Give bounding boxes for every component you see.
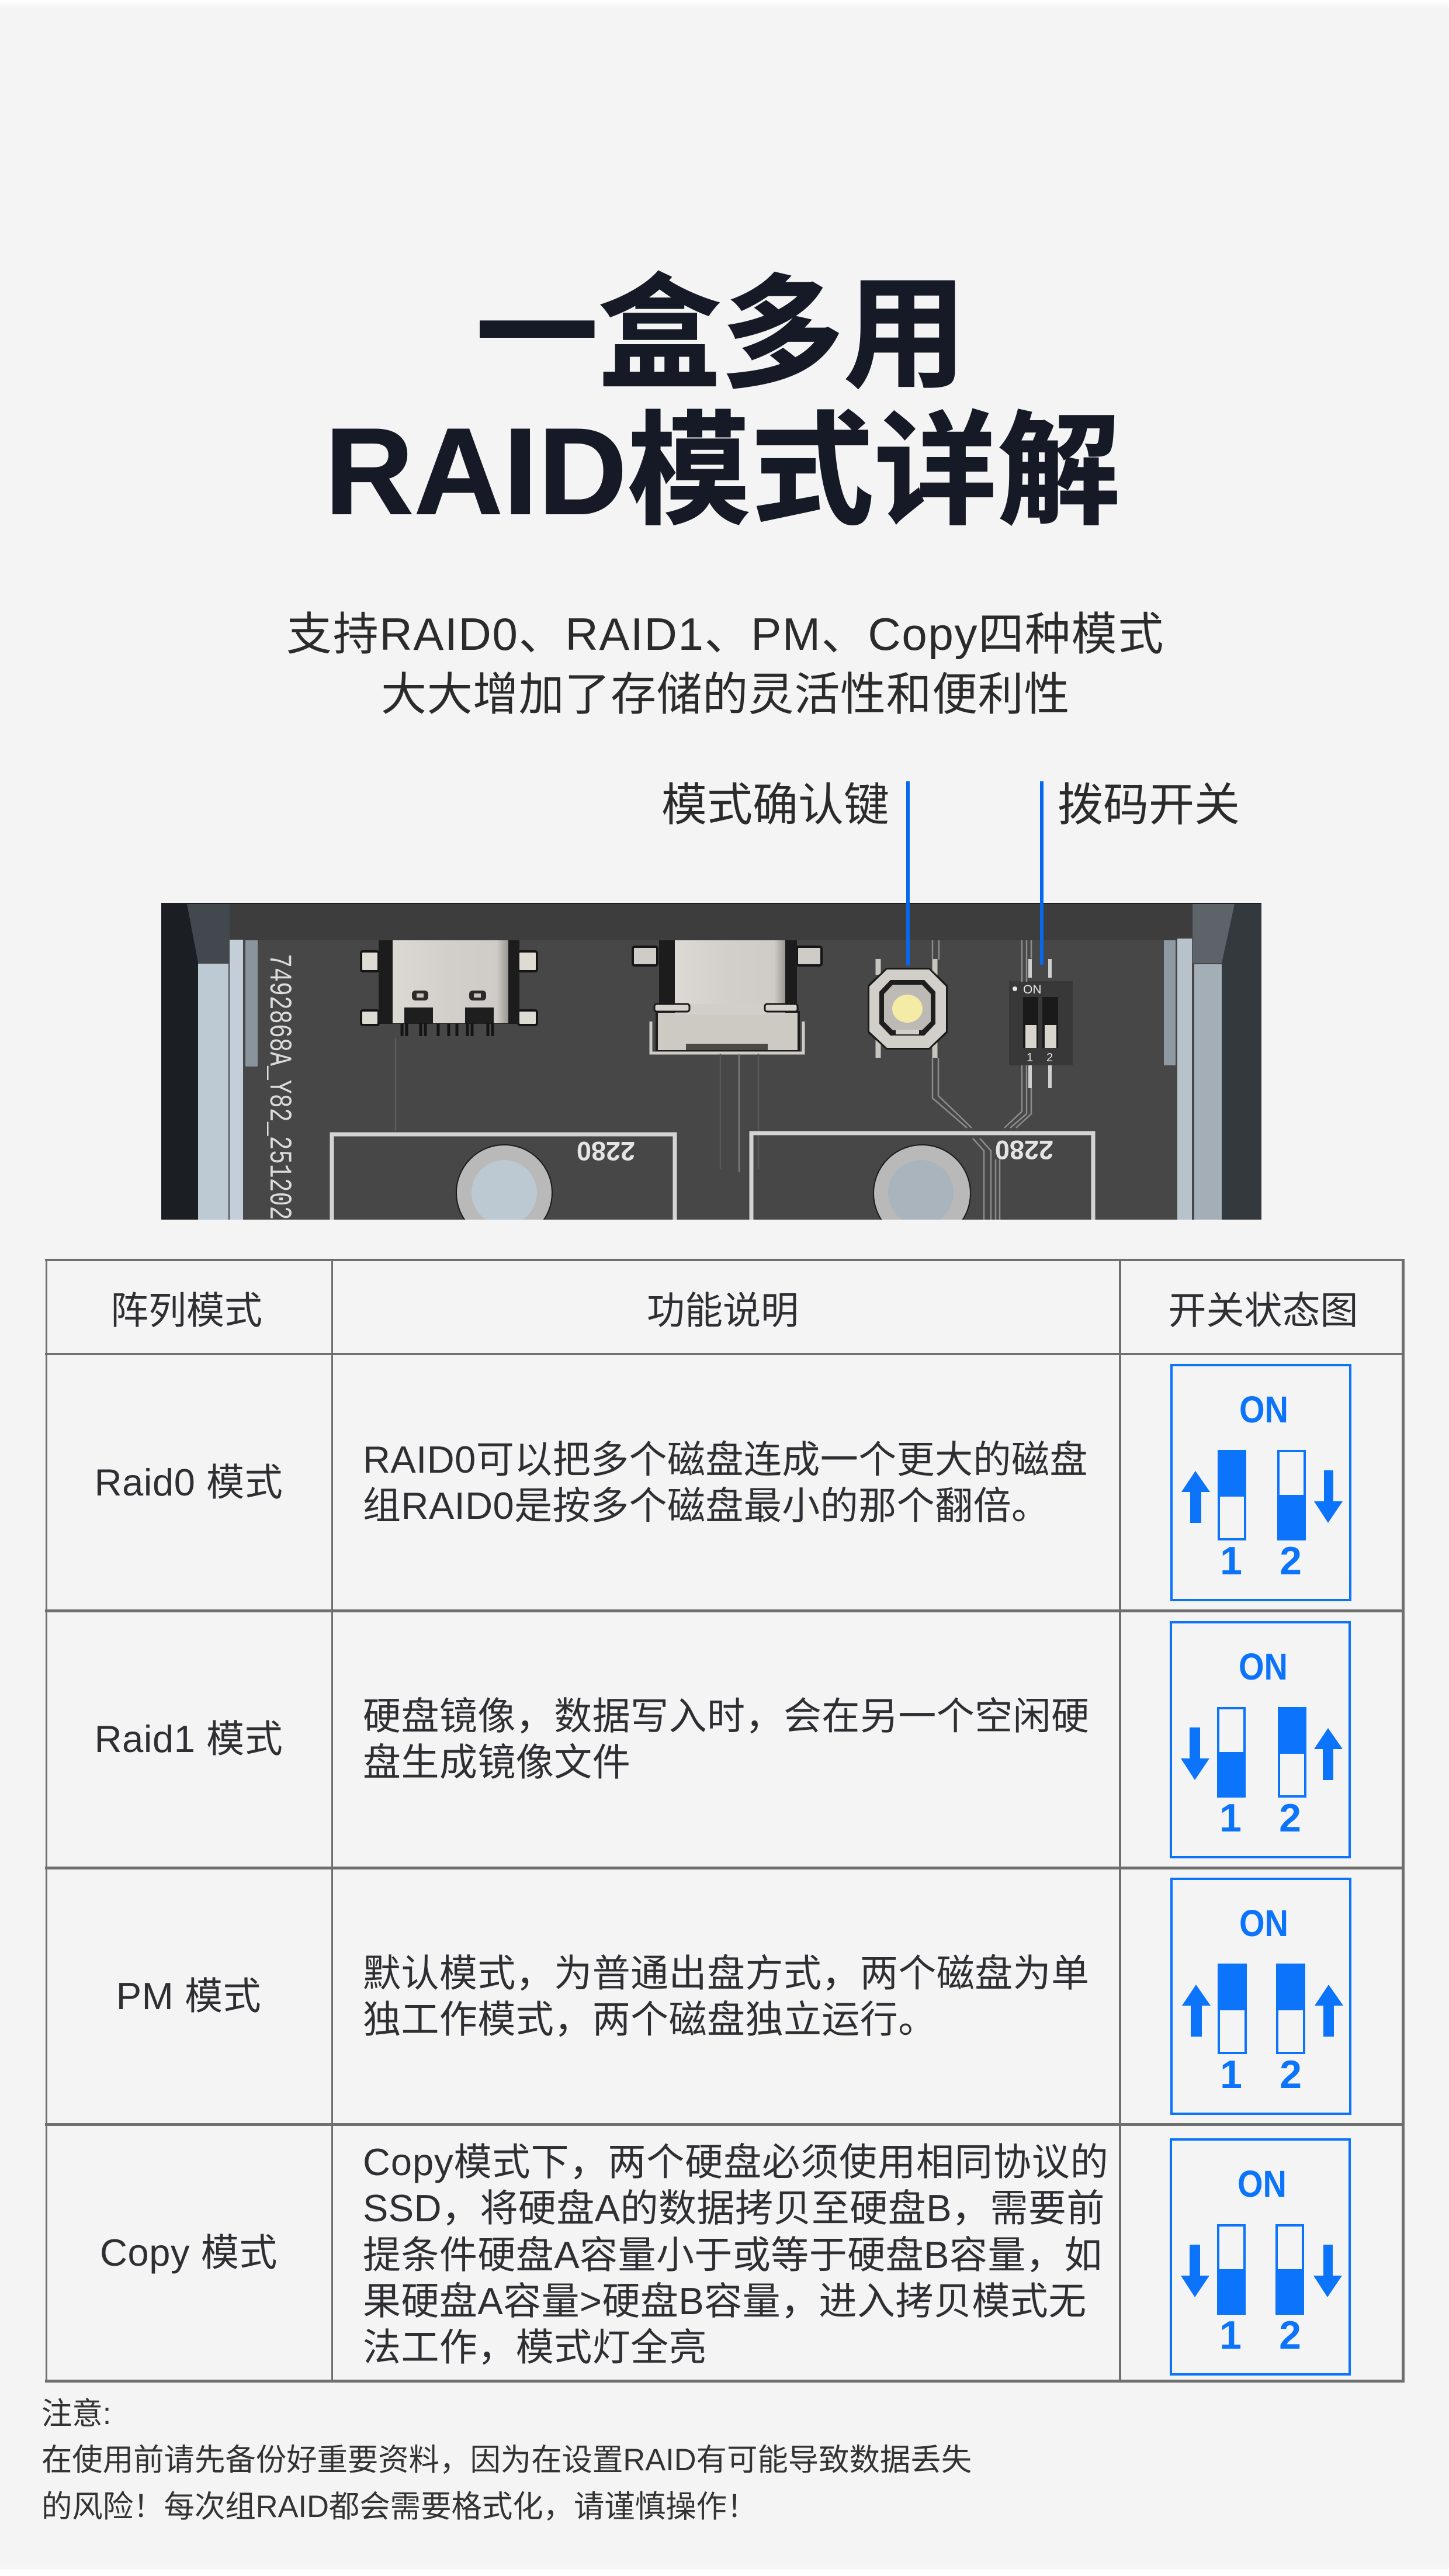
description: 盘生成镜像文件 [363,1741,630,1784]
switch diagram: both up [1170,1878,1351,2115]
mode name: Raid0 模式 [95,1461,283,1504]
mode name: Raid1 模式 [95,1718,283,1760]
switch diagram: 1 down, 2 up: 1 [1219,1796,1242,1840]
table header row [110,1289,1358,1332]
description: 组RAID0是按多个磁盘最小的那个翻倍。 [363,1484,1049,1527]
switch diagram: 1 up, 2 down: ON [1239,1389,1288,1431]
description: 法工作，模式灯全亮 [363,2326,707,2369]
switch diagram: both up: 1 [1220,2052,1242,2097]
switch diagram: both down: 1 [1219,2313,1242,2357]
description: 硬盘镜像，数据写入时，会在另一个空闲硬 [363,1695,1090,1737]
switch diagram: 1 up, 2 down [1170,1364,1351,1601]
row: Raid0 mode [95,1364,1351,1601]
USB-C connector 2 [633,940,821,1053]
switch diagram: 1 down, 2 up: 2 [1279,1796,1301,1840]
description: 提条件硬盘A容量小于或等于硬盘B容量，如 [363,2234,1103,2276]
switch diagram: 1 down, 2 up [1170,1621,1351,1858]
circuit traces [396,940,1031,1220]
description [363,1438,1088,1527]
description: Copy模式下，两个硬盘必须使用相同协议的 [363,2141,1109,2183]
switch diagram: both up: 2 [1280,2052,1302,2097]
switch diagram: 1 up, 2 down: 2 [1280,1539,1302,1583]
description: RAID0可以把多个磁盘连成一个更大的磁盘 [363,1438,1088,1481]
left enclosure wall [161,903,258,1220]
tactile mode button [868,959,948,1058]
description: 独工作模式，两个磁盘独立运行。 [363,1998,937,2041]
description [363,1695,1090,1784]
subtitle line 2: 大大增加了存储的灵活性和便利性 [381,669,1070,720]
description: SSD，将硬盘A的数据拷贝至硬盘B，需要前 [363,2187,1105,2229]
row: PM mode [116,1878,1351,2115]
M.2 slot 2 outline: 2280 [995,1135,1053,1165]
DIP switch component: 1 [1027,1051,1033,1064]
RAID mode table [45,1259,1405,2383]
description: 默认模式，为普通出盘方式，两个磁盘为单 [363,1952,1090,1995]
label: DIP switch: 拨码开关 [1058,779,1240,830]
M.2 slot 1 outline: 2280 [577,1136,635,1166]
DIP switch component [1009,959,1073,1088]
row: Copy mode [100,2138,1351,2376]
DIP switch component: ON [1023,983,1041,996]
DIP switch component: 2 [1046,1051,1053,1064]
switch diagram: both down [1170,2138,1351,2376]
description [363,1952,1090,2041]
header: function description: 功能说明 [647,1289,799,1332]
mode name: PM 模式 [116,1975,261,2017]
description [363,2141,1109,2369]
switch diagram: both down: 2 [1279,2313,1301,2357]
row: Raid1 mode [95,1621,1351,1858]
subtitle line 1: 支持RAID0、RAID1、PM、Copy四种模式 [286,608,1164,660]
callout line: DIP switch [1040,781,1044,965]
title line 1: 一盒多用 [476,266,966,403]
switch diagram: 1 down, 2 up: ON [1239,1646,1288,1688]
switch diagram: 1 up, 2 down: 1 [1220,1539,1242,1583]
header: switch state diagram: 开关状态图 [1168,1289,1358,1332]
title line 2: RAID模式详解 [325,403,1121,540]
switch diagram: both up: ON [1239,1902,1288,1944]
PCB board image [161,903,1261,1220]
callout line: mode confirm key [906,781,910,965]
description: 果硬盘A容量>硬盘B容量，进入拷贝模式无 [363,2280,1087,2322]
USB-C connector 1 [361,940,537,1036]
note line 1: 在使用前请先备份好重要资料，因为在设置RAID有可能导致数据丢失 [41,2443,972,2477]
switch diagram: both down: ON [1237,2163,1287,2205]
note heading: 注意: [41,2397,111,2431]
right enclosure wall [1164,904,1261,1220]
note line 2: 的风险！每次组RAID都会需要格式化，请谨慎操作！ [41,2490,757,2524]
M.2 slot 2 outline [751,1133,1093,1242]
M.2 slot 1 outline [332,1134,675,1241]
header: array mode: 阵列模式 [110,1289,262,1332]
label: mode confirm key: 模式确认键 [661,779,889,830]
notes block [41,2397,972,2524]
mode name: Copy 模式 [100,2231,278,2274]
